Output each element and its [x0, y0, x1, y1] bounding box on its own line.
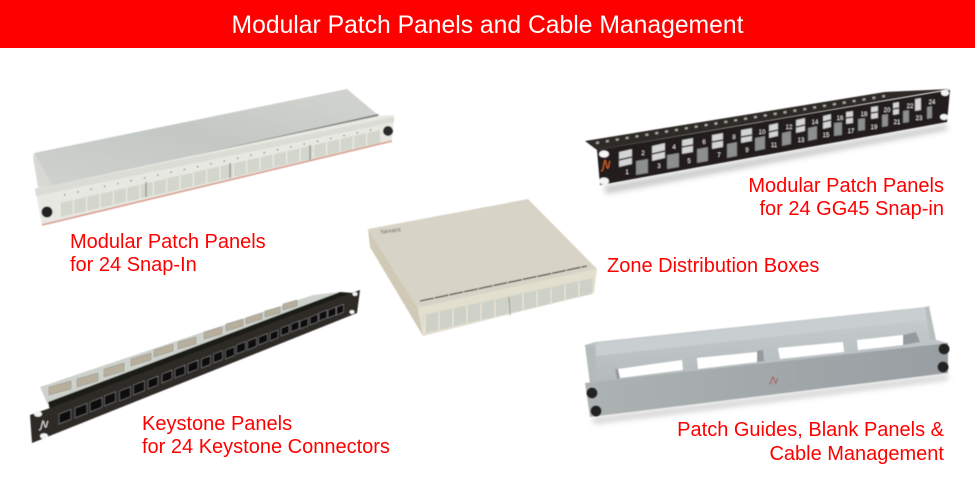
product photo: modular patch panel for 24 snap-in [33, 89, 394, 225]
port numbers: 5 [687, 159, 691, 165]
product photo: patch guide [585, 306, 950, 424]
port numbers: 4 [672, 145, 676, 151]
port numbers: 6 [702, 140, 706, 146]
port numbers: 3 [657, 164, 661, 170]
cable windows [618, 360, 683, 378]
label: patch guides, blank panels and cable management: Cable Management [769, 443, 944, 465]
port numbers: 13 [798, 138, 805, 144]
port numbers: 16 [837, 116, 844, 122]
lower snap-in openings [636, 106, 932, 175]
port numbers: 10 [759, 130, 766, 136]
product photo: modular patch panel for 24 GG45 snap-in [585, 89, 950, 194]
port numbers: 19 [871, 125, 878, 131]
title banner [0, 0, 975, 48]
port numbers: 8 [732, 135, 736, 141]
port numbers: 22 [907, 104, 914, 110]
port numbers: 15 [823, 133, 830, 139]
port numbers: 20 [884, 108, 891, 114]
port numbers: 1 [625, 170, 629, 176]
label: keystone panels: for 24 Keystone Connectors [142, 436, 390, 458]
product photo: keystone panel [30, 290, 360, 443]
product photo: zone distribution box [368, 199, 597, 336]
label: modular patch panels for 24 GG45 snap-in: Modular Patch Panels [748, 175, 944, 197]
port numbers: 11 [771, 143, 778, 149]
label: zone distribution boxes: Zone Distribution Boxes [607, 255, 819, 277]
icon: white logo [39, 421, 48, 430]
tray tabs [49, 300, 297, 395]
port numbers: 21 [894, 120, 901, 126]
label: modular patch panels for 24 snap-in: Modular Patch Panels [70, 231, 266, 253]
port numbers: 14 [812, 120, 819, 126]
port numbers [625, 100, 936, 176]
upper snap-in openings [619, 98, 921, 167]
label: modular patch panels for 24 snap-in: for 24 Snap-In [70, 254, 197, 276]
port numbers: 24 [929, 100, 936, 106]
port numbers: 12 [786, 125, 793, 131]
label: patch guides, blank panels and cable management: Patch Guides, Blank Panels & [677, 419, 944, 441]
keystone openings [59, 304, 344, 424]
port numbers: 18 [861, 112, 868, 118]
title banner: Modular Patch Panels and Cable Management [232, 12, 744, 39]
port numbers: 2 [641, 151, 645, 157]
label: keystone panels: Keystone Panels [142, 413, 292, 435]
icon: orange logo [601, 160, 610, 171]
product photo: zone distribution box: Nexans [380, 227, 401, 236]
port numbers: 23 [916, 116, 923, 122]
port numbers: 7 [717, 153, 721, 159]
port numbers: 9 [745, 148, 749, 154]
label: modular patch panels for 24 GG45 snap-in: for 24 GG45 Snap-in [759, 198, 944, 220]
port numbers: 17 [848, 129, 855, 135]
